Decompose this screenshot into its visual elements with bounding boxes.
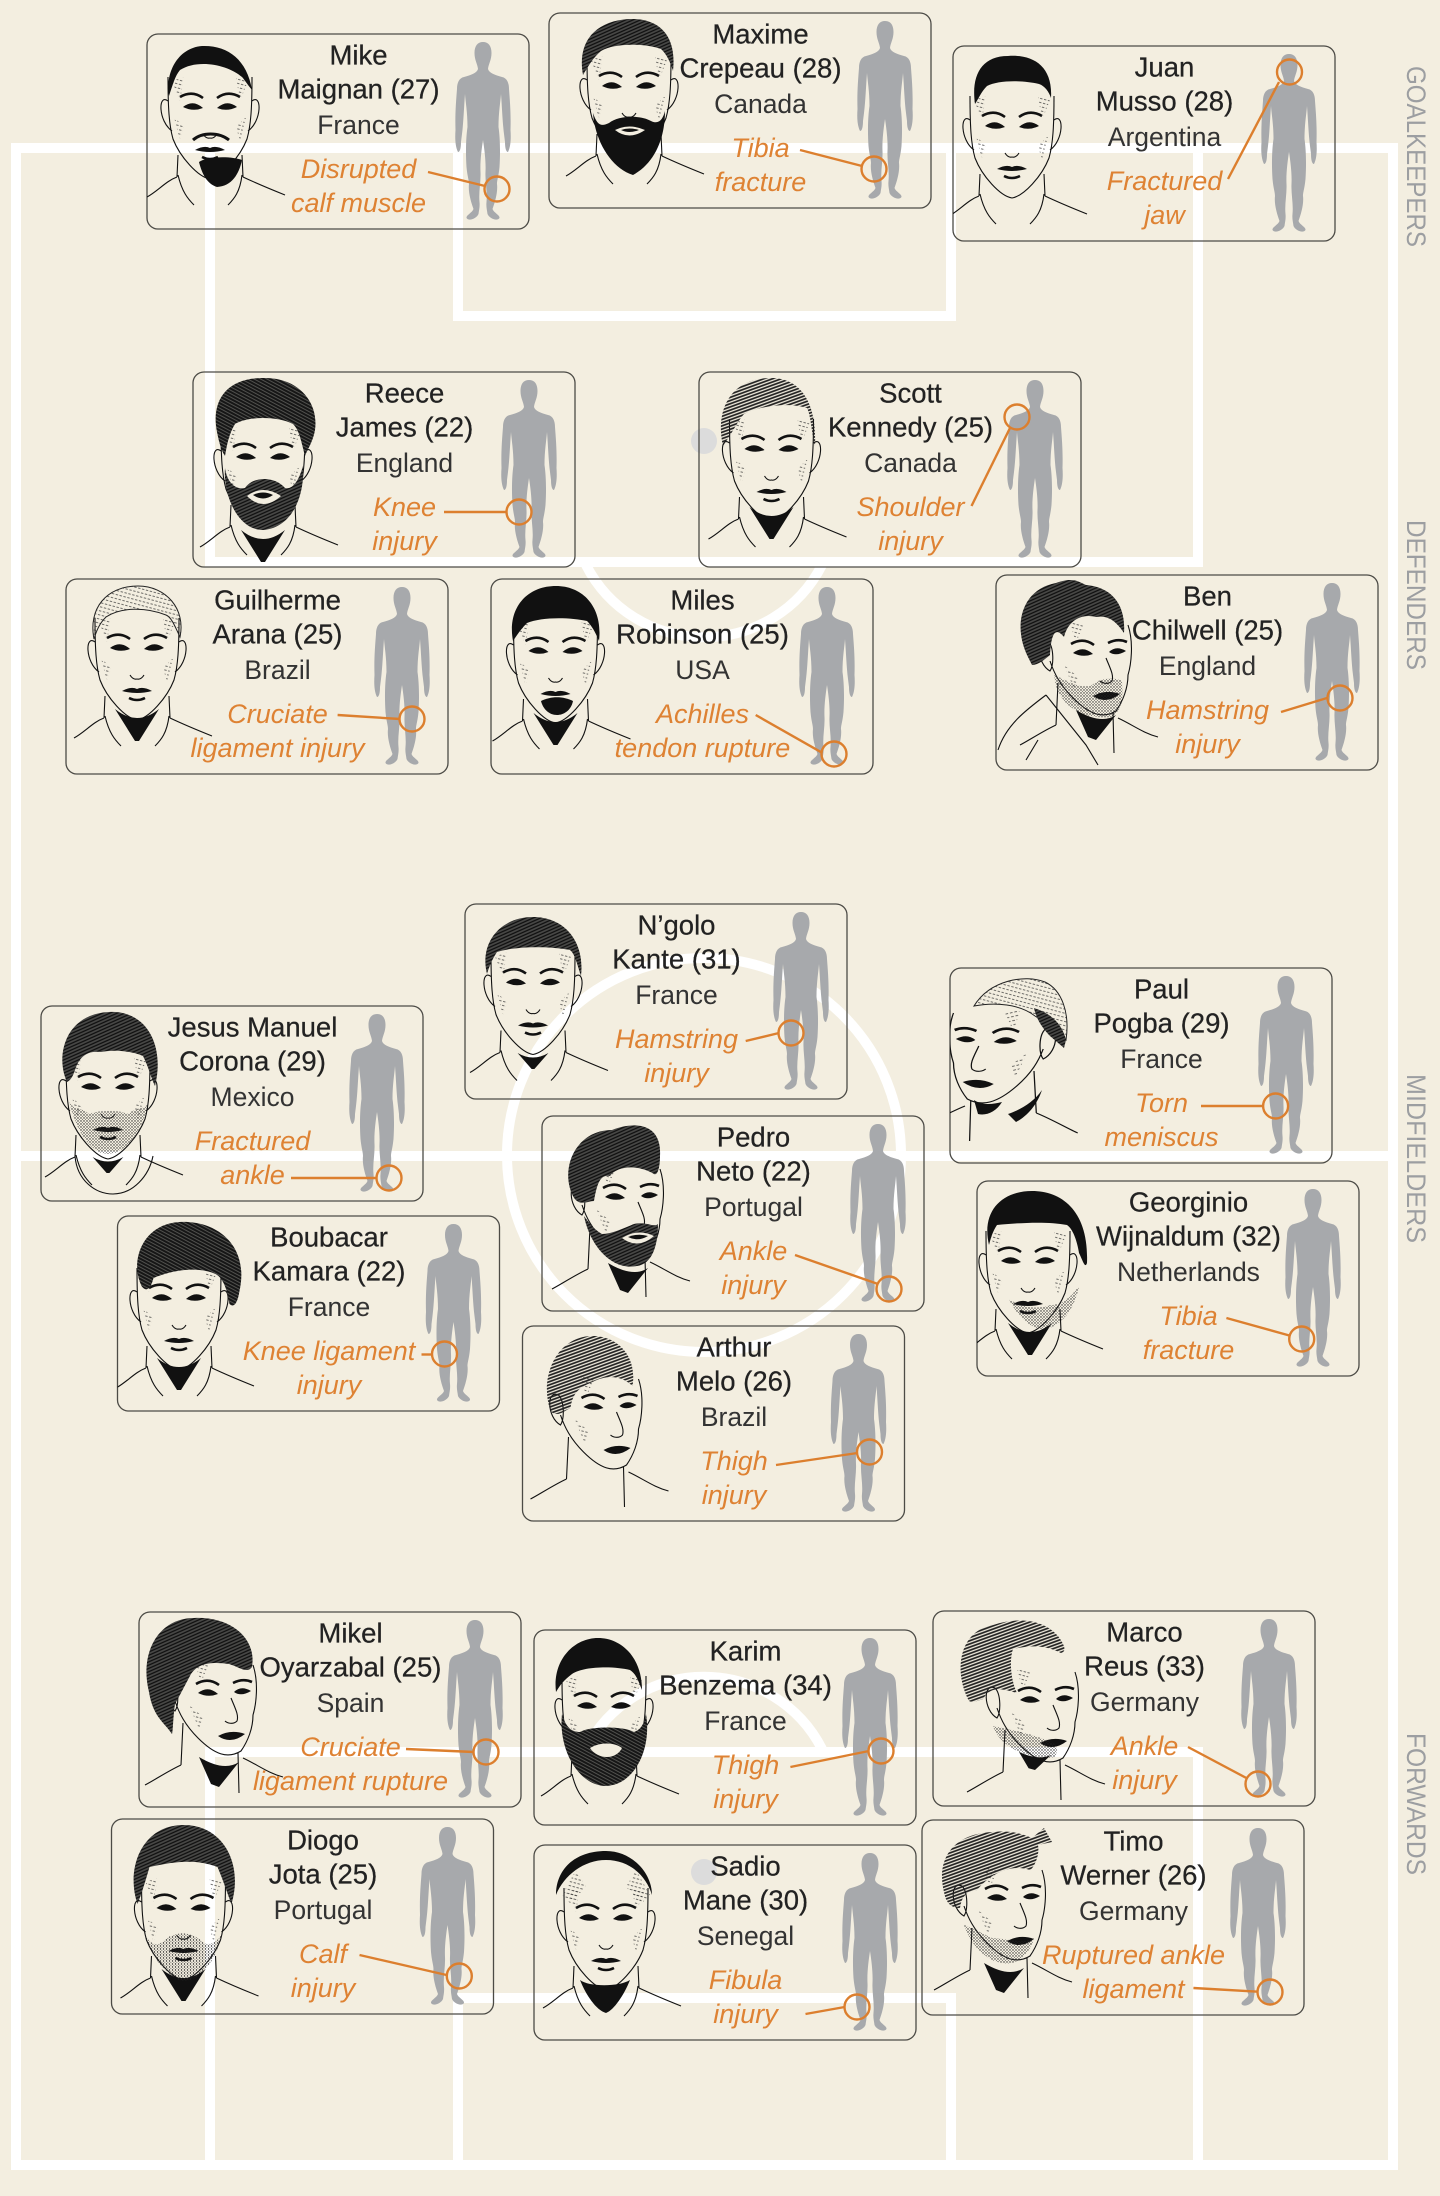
portrait: Scott Kennedy [708, 378, 846, 547]
injury label: Disrupted [301, 154, 417, 184]
player name: N’golo [638, 910, 715, 940]
section label: midfielders: MIDFIELDERS [1401, 1074, 1431, 1243]
portrait: Mikel Oyarzabal [145, 1618, 283, 1793]
body silhouette with injury marker [428, 42, 511, 220]
player name: Wijnaldum (32) [1096, 1220, 1281, 1252]
player name: Benzema (34) [659, 1670, 832, 1700]
player name: Reus (33) [1084, 1650, 1205, 1682]
panel: N'golo Kante [465, 904, 847, 1099]
country: Mexico [211, 1082, 294, 1112]
player name: James (22) [336, 412, 473, 442]
player name: Pedro [717, 1122, 790, 1152]
panel: Arthur Melo [522, 1326, 904, 1521]
player name: Mikel [318, 1618, 383, 1648]
player name: Boubacar [270, 1222, 388, 1252]
body silhouette with injury marker [444, 380, 557, 558]
country: France [288, 1292, 370, 1322]
body silhouette with injury marker [360, 1827, 475, 2005]
panel: Maxime Crepeau [549, 13, 931, 208]
player name: Chilwell (25) [1132, 614, 1283, 646]
player name: Corona (29) [179, 1046, 326, 1076]
body silhouette with injury marker [972, 380, 1063, 558]
body silhouette with injury marker [1193, 1828, 1286, 2006]
injury label: Thigh [700, 1446, 768, 1476]
panel: Mikel Oyarzabal [139, 1612, 521, 1807]
player name: Georginio [1129, 1186, 1248, 1218]
player name: Werner (26) [1060, 1860, 1207, 1890]
country: England [1159, 651, 1256, 681]
player name: Robinson (25) [616, 618, 789, 650]
injury label: Tibia [731, 133, 790, 163]
player name: Arana (25) [213, 618, 342, 650]
portrait: Karim Benzema [541, 1638, 679, 1804]
player name: Pogba (29) [1093, 1008, 1230, 1038]
player name: Arthur [697, 1332, 771, 1362]
body silhouette with injury marker [756, 587, 855, 766]
panel: Timo Werner [922, 1820, 1304, 2015]
portrait: Mike Maignan [147, 46, 285, 205]
injury label: injury [291, 1973, 357, 2003]
player name: Musso (28) [1096, 86, 1233, 116]
country: Germany [1079, 1896, 1189, 1926]
body silhouette with injury marker [806, 1853, 898, 2031]
injury label: meniscus [1104, 1122, 1219, 1152]
portrait: Marco Reus [961, 1620, 1105, 1800]
panel: Sadio Mane [534, 1845, 916, 2040]
player name: Jota (25) [269, 1858, 377, 1890]
country: France [635, 980, 718, 1010]
section label: defenders: DEFENDERS [1401, 520, 1431, 670]
body silhouette with injury marker [746, 912, 829, 1090]
player name: Ben [1183, 580, 1232, 612]
injury label: Knee [373, 492, 436, 522]
injury label: injury [713, 1999, 779, 2029]
injury label: tendon rupture [615, 733, 790, 763]
injury label: ligament injury [190, 733, 366, 763]
country: France [317, 110, 400, 140]
player name: Oyarzabal (25) [260, 1652, 441, 1682]
portrait: N'golo Kante [470, 917, 608, 1080]
panel: Jesus Manuel Corona [41, 1006, 423, 1201]
injury label: Fibula [709, 1965, 782, 1995]
country: Brazil [244, 655, 311, 685]
player name: Guilherme [214, 584, 341, 616]
player name: Scott [879, 378, 942, 408]
panel: Pedro Neto [542, 1116, 924, 1311]
player name: Reece [365, 378, 444, 408]
injury label: injury [644, 1058, 710, 1088]
player name: Crepeau (28) [679, 52, 842, 84]
injury label: injury [721, 1270, 787, 1300]
body silhouette with injury marker [1281, 583, 1360, 761]
player name: Mane (30) [683, 1884, 808, 1916]
injury label: Fractured [1107, 166, 1223, 196]
body silhouette with injury marker [776, 1334, 886, 1512]
country: England [356, 448, 453, 478]
player name: Timo [1103, 1826, 1164, 1856]
injury label: ankle [220, 1160, 285, 1190]
injury label: fracture [715, 167, 806, 197]
player name: Karim [710, 1636, 781, 1666]
panel: Marco Reus [933, 1611, 1315, 1806]
panel: Diogo Jota [112, 1819, 494, 2014]
player name: Maxime [712, 18, 809, 50]
country: Portugal [704, 1192, 803, 1222]
body silhouette with injury marker [422, 1224, 481, 1402]
injury label: calf muscle [291, 188, 426, 218]
injury label: Ankle [1109, 1731, 1178, 1761]
player name: Diogo [287, 1824, 359, 1856]
player name: Juan [1135, 52, 1194, 82]
injury label: injury [372, 526, 438, 556]
section label: goalkeepers: GOALKEEPERS [1401, 66, 1431, 247]
country: Senegal [697, 1921, 794, 1951]
injury label: injury [702, 1480, 768, 1510]
country: France [704, 1706, 787, 1736]
portrait: Timo Werner [934, 1828, 1072, 1998]
body silhouette with injury marker [291, 1014, 405, 1192]
player name: Paul [1134, 974, 1189, 1004]
portrait: Paul Pogba [950, 978, 1078, 1141]
country: Spain [317, 1688, 384, 1718]
injury label: injury [1175, 729, 1241, 759]
injury label: Thigh [712, 1750, 779, 1780]
player name: Miles [670, 584, 735, 616]
portrait: Diogo Jota [120, 1825, 258, 2006]
player name: Neto (22) [696, 1156, 811, 1186]
player name: Kamara (22) [253, 1256, 405, 1286]
portrait: Guilherme Arana [74, 586, 212, 746]
injury label: injury [713, 1784, 779, 1814]
country: Brazil [701, 1402, 767, 1432]
injury label: Cruciate [227, 699, 328, 729]
country: Netherlands [1117, 1257, 1260, 1287]
injury label: Fractured [195, 1126, 311, 1156]
panel: Miles Robinson [491, 579, 873, 774]
body silhouette with injury marker [790, 1638, 898, 1816]
body silhouette with injury marker [1226, 1189, 1341, 1367]
panel: Guilherme Arana [66, 579, 448, 774]
portrait: Juan Musso [949, 56, 1087, 224]
portrait: Georginio Wijnaldum [965, 1191, 1103, 1359]
portrait: Maxime Crepeau [566, 19, 704, 184]
body silhouette with injury marker [800, 21, 913, 199]
injury label: injury [1112, 1765, 1178, 1795]
panel: Mike Maignan [147, 34, 529, 229]
player name: Kennedy (25) [828, 412, 993, 442]
injury label: Achilles [654, 699, 749, 729]
injury label: Hamstring [1146, 695, 1269, 725]
panel: Paul Pogba [919, 968, 1332, 1163]
injury label: Hamstring [615, 1024, 738, 1054]
injury label: Knee ligament [243, 1336, 417, 1366]
body silhouette with injury marker [1228, 54, 1317, 232]
portrait: Boubacar Kamara [116, 1222, 254, 1396]
body silhouette with injury marker [338, 587, 430, 765]
injury label: injury [878, 526, 944, 556]
panel: Scott Kennedy [699, 372, 1081, 567]
player name: Jesus Manuel [168, 1012, 337, 1042]
country: Canada [864, 448, 957, 478]
portrait: Ben Chilwell [998, 580, 1158, 765]
panel: Ben Chilwell [996, 575, 1378, 770]
country: Portugal [274, 1895, 372, 1925]
country: USA [675, 655, 730, 685]
injury label: Tibia [1159, 1301, 1218, 1331]
portrait: Miles Robinson [492, 586, 630, 749]
player name: Kante (31) [612, 944, 741, 974]
portrait: Pedro Neto [552, 1125, 690, 1297]
injury label: injury [297, 1370, 363, 1400]
player name: Maignan (27) [277, 74, 440, 104]
body silhouette with injury marker [1201, 976, 1314, 1154]
body silhouette with injury marker [1188, 1619, 1297, 1797]
portrait: Sadio Mane [543, 1851, 681, 2016]
injury label: ligament [1082, 1974, 1186, 2004]
player name: Sadio [710, 1850, 781, 1882]
portrait: Arthur Melo [530, 1336, 668, 1507]
body silhouette with injury marker [406, 1620, 503, 1798]
panel: Juan Musso [949, 46, 1335, 241]
panel: Georginio Wijnaldum [965, 1181, 1359, 1376]
portrait: Reece James [200, 378, 338, 562]
injury label: Torn [1135, 1088, 1188, 1118]
portrait: Jesus Manuel Corona [45, 1012, 183, 1194]
injury label: ligament rupture [253, 1766, 448, 1796]
injury label: Cruciate [300, 1732, 401, 1762]
injury label: jaw [1140, 200, 1186, 230]
country: Argentina [1108, 122, 1221, 152]
panel: Karim Benzema [534, 1630, 916, 1825]
country: Canada [714, 89, 807, 119]
injury label: Calf [299, 1939, 350, 1969]
player name: Melo (26) [676, 1366, 792, 1396]
injury label: Ankle [718, 1236, 787, 1266]
panel: Boubacar Kamara [116, 1216, 500, 1411]
injury label: Shoulder [856, 492, 966, 522]
country: France [1120, 1044, 1203, 1074]
panel: Reece James [193, 372, 575, 567]
player name: Mike [329, 40, 388, 70]
injury label: Ruptured ankle [1042, 1940, 1225, 1970]
country: Germany [1090, 1687, 1200, 1717]
injury label: fracture [1143, 1335, 1234, 1365]
player name: Marco [1106, 1616, 1183, 1648]
section label: forwards: FORWARDS [1401, 1733, 1431, 1875]
body silhouette with injury marker [795, 1124, 906, 1302]
